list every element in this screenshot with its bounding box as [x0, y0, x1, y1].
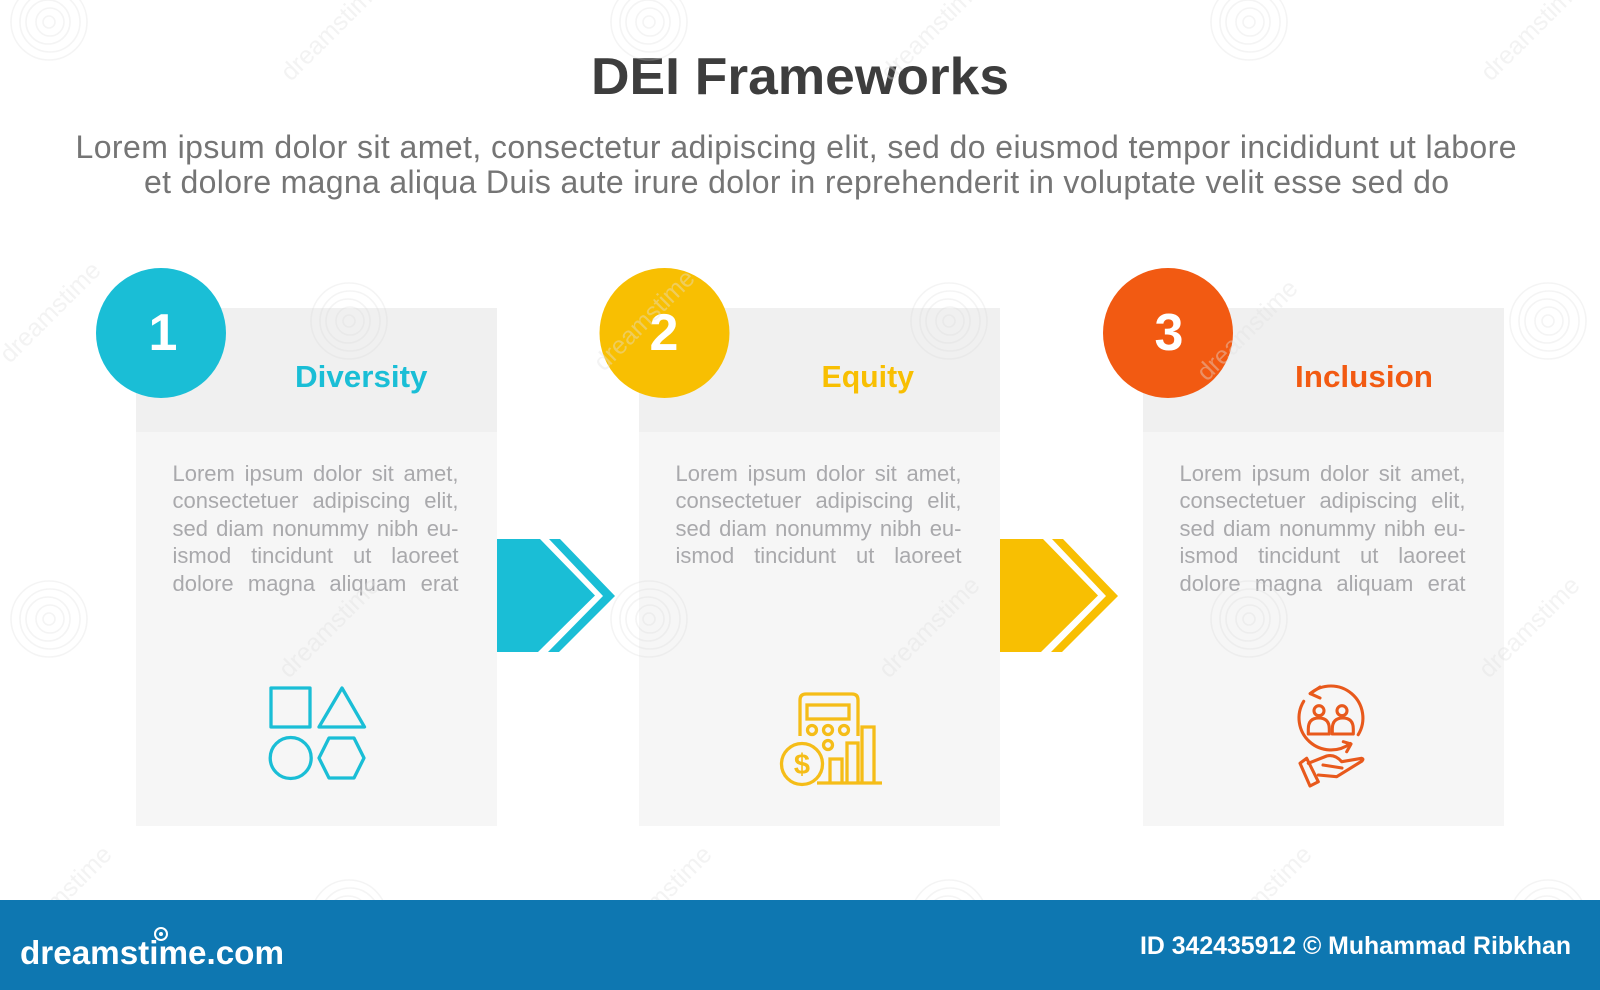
- subtitle text block: [76, 129, 1516, 200]
- panel: inclusion: 3: [1155, 304, 1183, 362]
- watermark layer: dreamstime: [273, 571, 385, 683]
- text block: diversity description: dolore magna aliquam erat: [172, 571, 458, 596]
- text block: equity description: sed diam nonummy nibh eu-: [676, 516, 962, 541]
- panel: diversity: 1: [149, 304, 177, 362]
- footer bar: [0, 900, 1600, 990]
- panel: equity: $: [794, 749, 810, 781]
- watermark layer: dreamstime: [5, 840, 117, 952]
- watermark layer: dreamstime: [1191, 274, 1303, 386]
- text block: equity description: consectetuer adipiscing elit,: [676, 488, 962, 513]
- watermark layer: dreamstime: [588, 264, 700, 376]
- title: DEI Frameworks: [591, 48, 1009, 106]
- panel: equity: Equity: [822, 359, 915, 394]
- text block: diversity description: consectetuer adipiscing elit,: [172, 488, 458, 513]
- panel: inclusion: Inclusion: [1295, 359, 1433, 394]
- text block: diversity description: sed diam nonummy nibh eu-: [172, 516, 458, 541]
- text block: equity description: [676, 461, 962, 568]
- watermark layer: dreamstime: [873, 571, 985, 683]
- text block: inclusion description: consectetuer adipiscing elit,: [1180, 488, 1466, 513]
- text block: diversity description: [172, 461, 458, 596]
- text block: equity description: ismod tincidunt ut laoreet: [676, 543, 962, 568]
- watermark layer: dreamstime: [605, 840, 717, 952]
- text block: diversity description: Lorem ipsum dolor sit amet,: [172, 461, 458, 486]
- text block: diversity description: ismod tincidunt ut laoreet: [172, 543, 458, 568]
- watermark layer: dreamstime: [1473, 571, 1585, 683]
- panel: diversity: [96, 268, 497, 826]
- subtitle text block: Lorem ipsum dolor sit amet, consectetur adipiscing elit, sed do eiusmod tempor incididunt ut labore: [76, 129, 1516, 165]
- text block: equity description: Lorem ipsum dolor sit amet,: [676, 461, 962, 486]
- panel: diversity: Diversity: [295, 359, 428, 394]
- footer credit: ID 342435912 © Muhammad Ribkhan: [1140, 932, 1571, 960]
- arrow: diversity to equity: [497, 539, 615, 652]
- panel: equity: [600, 268, 1000, 826]
- arrow: equity to inclusion: [1000, 539, 1118, 652]
- text block: inclusion description: [1180, 461, 1466, 596]
- footer logo: dreamstime.com: [20, 934, 284, 971]
- panel: inclusion: [1103, 268, 1504, 826]
- text block: inclusion description: ismod tincidunt ut laoreet: [1180, 543, 1466, 568]
- text block: inclusion description: dolore magna aliquam erat: [1180, 571, 1466, 596]
- watermark layer: dreamstime: [1205, 840, 1317, 952]
- panel: equity: 2: [650, 304, 678, 362]
- text block: inclusion description: sed diam nonummy nibh eu-: [1180, 516, 1466, 541]
- subtitle text block: et dolore magna aliqua Duis aute irure dolor in reprehenderit in voluptate velit esse sed do: [144, 164, 1449, 200]
- text block: inclusion description: Lorem ipsum dolor sit amet,: [1180, 461, 1466, 486]
